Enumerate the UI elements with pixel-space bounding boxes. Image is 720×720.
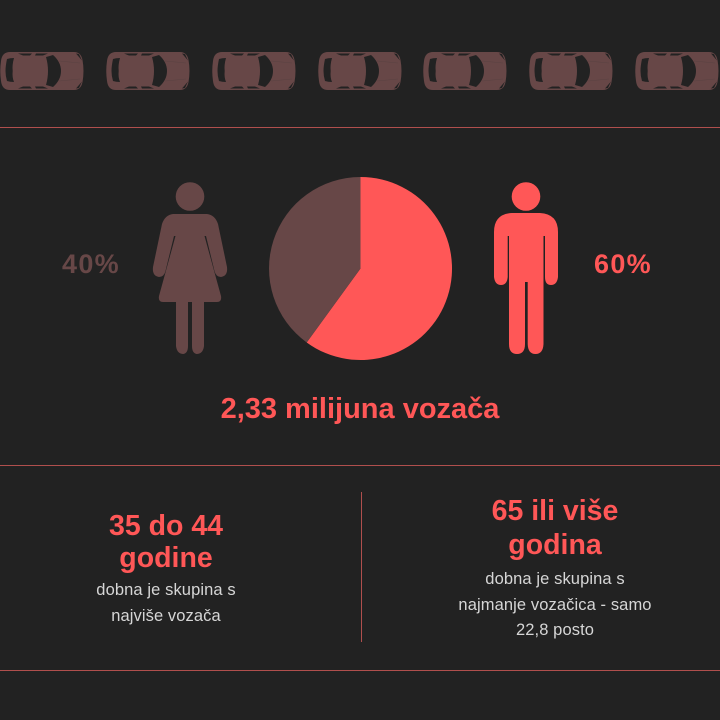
right stat heading: [492, 495, 618, 560]
left stat text: dobna je skupina s: [96, 581, 236, 599]
left stat heading: 35 do 44: [109, 510, 223, 542]
car 2: [106, 52, 190, 90]
car 7: [635, 52, 718, 90]
right stat: [458, 495, 652, 639]
left stat heading: godine: [119, 542, 213, 574]
right stat text: dobna je skupina s: [485, 570, 625, 588]
car 6: [529, 52, 612, 90]
right stat heading: 65 ili više: [492, 495, 618, 527]
headline: total drivers: 2,33 milijuna vozača: [221, 393, 499, 425]
left stat heading: [109, 510, 223, 574]
icon: woman: [152, 182, 228, 354]
right stat text: najmanje vozačica - samo: [458, 596, 652, 614]
label: 60%: 60%: [594, 249, 652, 279]
pie chart: [269, 177, 452, 360]
pie slice: 60 percent: [307, 177, 452, 360]
left stat text: najviše vozača: [111, 606, 221, 624]
label: 40%: 40%: [62, 249, 120, 279]
car 3: [212, 52, 296, 90]
car 4: [318, 52, 402, 90]
car 1: [0, 52, 84, 90]
pie slice: 40 percent: [269, 177, 360, 342]
left stat: [96, 510, 236, 624]
right stat text: [458, 570, 652, 639]
row of cars: [0, 52, 718, 90]
right stat heading: godina: [508, 528, 602, 560]
icon: man: [494, 182, 558, 354]
car 5: [423, 52, 506, 90]
right stat text: 22,8 posto: [516, 621, 594, 639]
left stat text: [96, 581, 236, 624]
